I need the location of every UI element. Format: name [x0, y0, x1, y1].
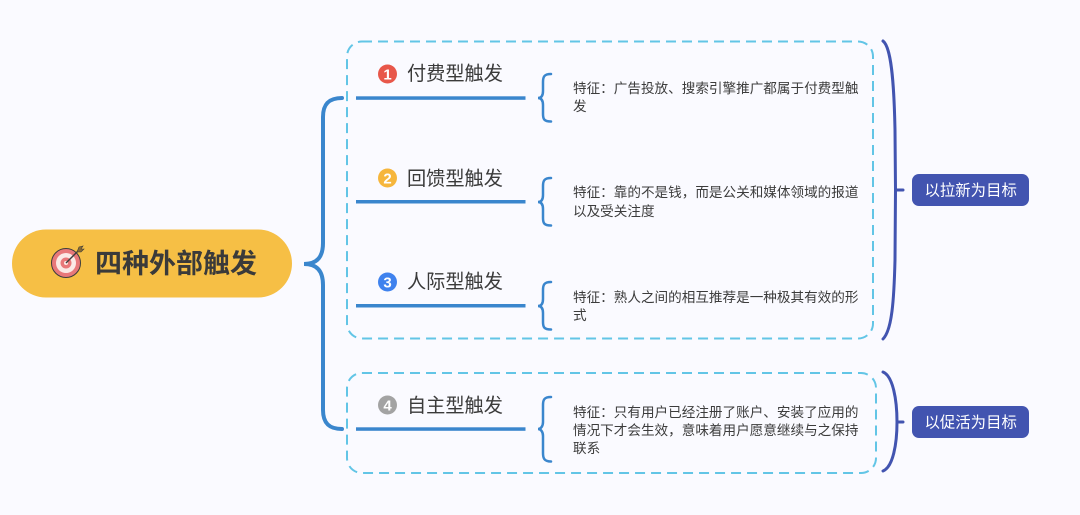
goal label: 以拉新为目标: 以拉新为目标: [924, 182, 1017, 200]
icon: number 3: [378, 272, 397, 292]
central topic: 四种外部触发: 四种外部触发: [95, 249, 257, 279]
branch 3: 人际型触发: [356, 271, 859, 330]
icon: target with arrow: [52, 246, 84, 278]
right bracket: lower group: [883, 372, 903, 471]
goal label: 以促活为目标: [912, 406, 1029, 438]
branch 1: 付费型触发: 付费型触发: [407, 63, 503, 85]
branch 1: 付费型触发: [356, 63, 859, 122]
icon: number 4: 4: [383, 398, 392, 414]
branch 1: 付费型触发: 特征：广告投放、搜索引擎推广都属于付费型触: [573, 81, 859, 96]
icon: number 3: 3: [383, 274, 392, 292]
branch 4: 自主型触发: 自主型触发: [407, 395, 503, 417]
branch 2: 回馈型触发: 回馈型触发: [407, 168, 503, 190]
icon: number 2: 2: [383, 170, 392, 188]
goal label: 以拉新为目标: [912, 174, 1029, 206]
branch 2: 回馈型触发: [356, 168, 859, 226]
right bracket: upper group: [883, 41, 903, 339]
branch 2: 回馈型触发: 特征：靠的不是钱，而是公关和媒体领域的报道: [573, 185, 859, 200]
icon: number 1: [378, 64, 397, 84]
group box: paid, feedback and social triggers: [347, 42, 873, 338]
branch 3: 人际型触发: 人际型触发: [407, 271, 503, 293]
branch 2: 回馈型触发: 以及受关注度: [573, 204, 655, 219]
branch 4: 自主型触发: 特征：只有用户已经注册了账户、安装了应用的: [573, 404, 858, 420]
goal label: 以促活为目标: 以促活为目标: [924, 414, 1017, 432]
branch 4: 自主型触发: 联系: [573, 441, 600, 456]
branch 4: 自主型触发: [356, 395, 859, 462]
branch 3: 人际型触发: 特征：熟人之间的相互推荐是一种极其有效的形: [573, 290, 859, 305]
icon: number 1: 1: [383, 66, 392, 84]
icon: number 2: [378, 168, 397, 188]
central topic: 四种外部触发: [12, 230, 292, 298]
icon: number 4: [378, 396, 397, 414]
branch 4: 自主型触发: 情况下才会生效，意味着用户愿意继续与之保持: [573, 422, 859, 438]
branch 1: 付费型触发: 发: [573, 99, 587, 114]
branch 3: 人际型触发: 式: [573, 308, 587, 323]
main bracket: [304, 98, 342, 429]
group box: self-driven trigger: [347, 373, 876, 473]
